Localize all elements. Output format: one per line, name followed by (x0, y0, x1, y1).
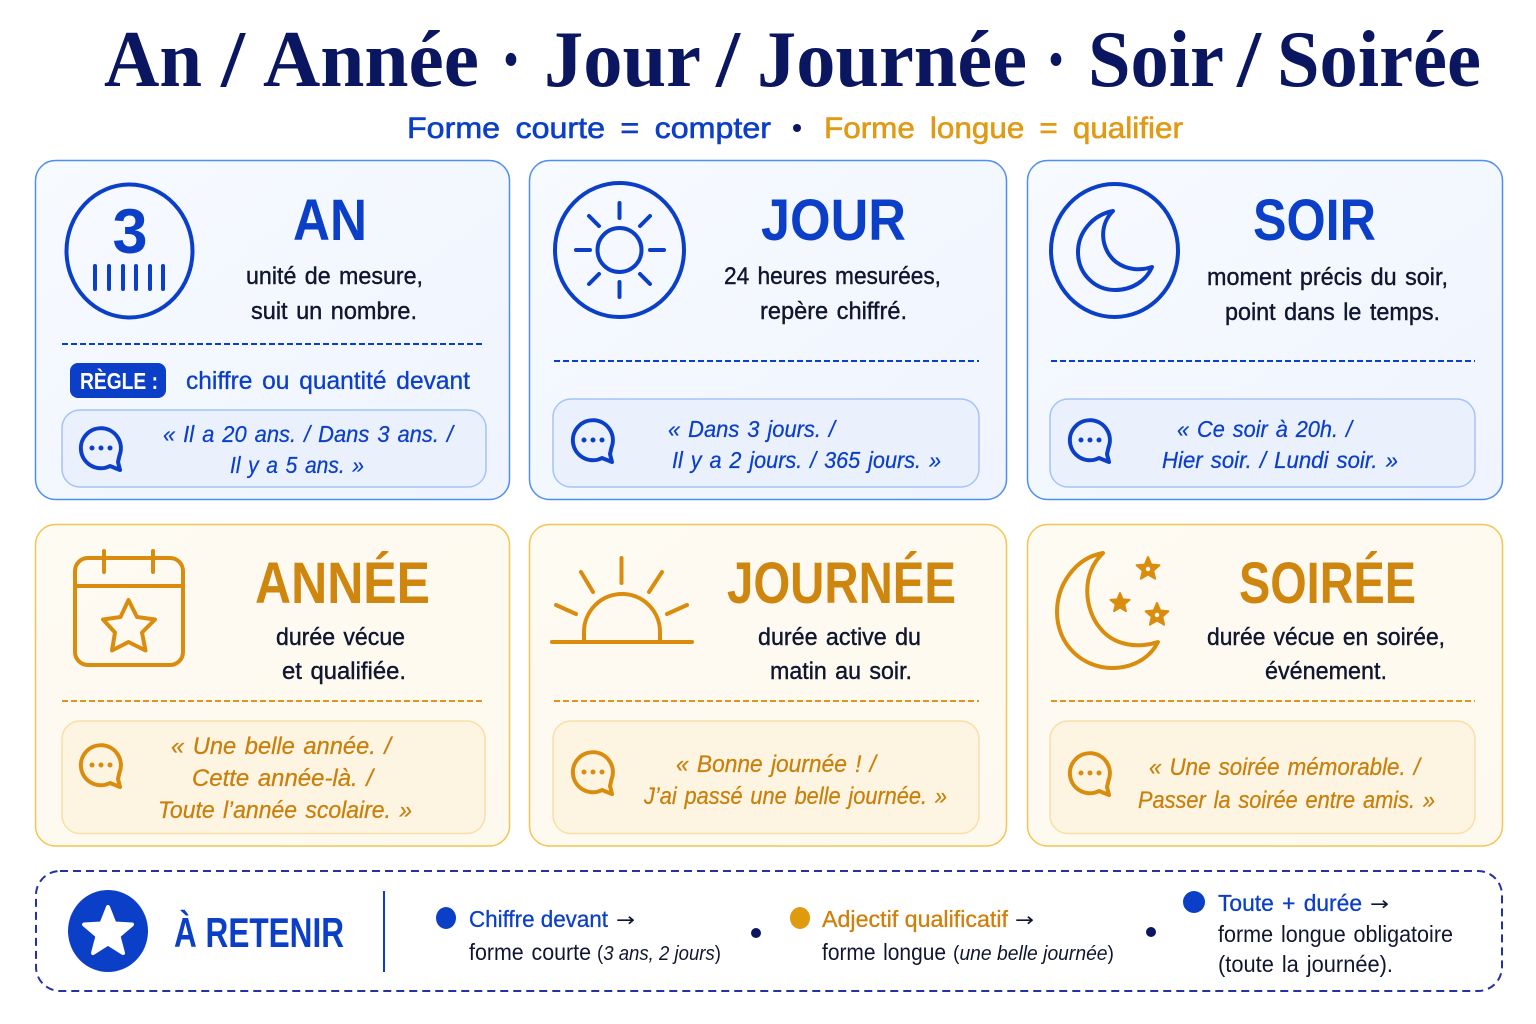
description: JOURNÉE: matin au soir. (770, 658, 912, 685)
example text: JOUR (668, 416, 941, 473)
icon: number three with tally marks: 3 (112, 197, 148, 267)
takeaway: chiffre devant: → (616, 909, 635, 931)
description: AN (246, 263, 423, 325)
example text: SOIR (1162, 416, 1398, 473)
title: Soirée (1277, 16, 1481, 104)
takeaway: chiffre devant: (3 ans, 2 jours) (597, 943, 721, 965)
heading: JOUR: JOUR (761, 188, 906, 253)
takeaway: adjectif qualificatif: → (1015, 909, 1034, 931)
takeaway: toute + durée (1183, 890, 1453, 977)
icon: speech bubble (573, 420, 613, 462)
heading: JOURNÉE: JOURNÉE (727, 551, 956, 616)
rule badge (70, 363, 166, 398)
icon: moon in circle (1051, 184, 1178, 317)
icon: moon and stars (1057, 553, 1168, 668)
example text: AN: Il y a 5 ans. » (230, 452, 364, 478)
description: JOURNÉE: durée active du (758, 624, 921, 651)
takeaway: adjectif qualificatif: (une belle journée) (953, 943, 1114, 965)
title: Journée (757, 16, 1027, 104)
title: Soir (1088, 16, 1224, 104)
icon: speech bubble (1070, 420, 1110, 462)
description: AN: unité de mesure, (246, 263, 423, 290)
example text: ANNÉE: Cette année-là. / (192, 765, 375, 792)
icon: speech bubble (1070, 753, 1110, 795)
example box: SOIRÉE (1050, 721, 1475, 834)
icon: speech bubble (81, 745, 121, 787)
description: ANNÉE: et qualifiée. (282, 658, 406, 685)
example box: JOUR (553, 399, 979, 487)
example box: JOURNÉE (553, 721, 979, 834)
subtitle (407, 112, 1183, 145)
description: JOURNÉE (758, 624, 921, 685)
takeaway: toute + durée: Toute + durée (1218, 890, 1362, 916)
description: JOUR: repère chiffré. (760, 298, 907, 325)
example text: AN: « Il a 20 ans. / Dans 3 ans. / (163, 421, 455, 447)
description: SOIRÉE: événement. (1265, 658, 1387, 685)
panel: à retenir (36, 871, 1502, 991)
example text: SOIR: « Ce soir à 20h. / (1177, 416, 1354, 442)
example text: ANNÉE: « Une belle année. / (171, 733, 393, 760)
rule text: chiffre ou quantité devant (186, 367, 470, 395)
title: Jour (544, 16, 701, 104)
title: / (220, 16, 247, 104)
example text: JOUR: « Dans 3 jours. / (668, 416, 837, 442)
icon: rising sun (552, 558, 692, 642)
takeaway: chiffre devant: Chiffre devant (469, 906, 609, 932)
panel: AN (36, 160, 510, 500)
example text: SOIR: Hier soir. / Lundi soir. » (1162, 447, 1398, 473)
rule badge: RÈGLE : (80, 367, 158, 394)
takeaway: adjectif qualificatif: Adjectif qualificatif (822, 906, 1009, 932)
panel: JOURNÉE (530, 524, 1006, 846)
title: · (1045, 16, 1067, 104)
heading: SOIR: SOIR (1253, 188, 1376, 253)
example text: SOIRÉE (1138, 754, 1435, 814)
separator dot (1146, 927, 1156, 937)
example text: ANNÉE (158, 733, 412, 824)
icon: calendar with star (75, 551, 183, 665)
takeaway: chiffre devant (436, 906, 721, 965)
description: SOIRÉE (1207, 624, 1445, 685)
description: ANNÉE: durée vécue (276, 624, 405, 651)
separator dot (751, 928, 761, 938)
description: JOUR (724, 263, 941, 325)
panel: SOIRÉE (1028, 524, 1502, 846)
subtitle: Forme longue = qualifier (824, 112, 1183, 145)
panel: SOIR (1028, 160, 1502, 500)
example text: AN (163, 421, 455, 478)
takeaway: toute + durée: (toute la journée). (1218, 951, 1393, 977)
example box: AN (62, 410, 486, 487)
description: ANNÉE (276, 624, 406, 685)
example text: JOURNÉE: « Bonne journée ! / (676, 751, 878, 778)
title: Année (263, 16, 479, 104)
example text: JOURNÉE: J’ai passé une belle journée. » (643, 783, 947, 810)
subtitle: Forme courte = compter (407, 112, 771, 145)
example text: SOIRÉE: Passer la soirée entre amis. » (1138, 787, 1435, 814)
description: SOIR: moment précis du soir, (1207, 264, 1448, 291)
title: · (500, 16, 522, 104)
example box: ANNÉE (62, 721, 485, 834)
heading: à retenir: À RETENIR (174, 909, 344, 956)
example text: JOURNÉE (643, 751, 947, 810)
panel: JOUR (530, 160, 1006, 500)
title: An (104, 16, 202, 104)
icon: speech bubble (573, 752, 613, 794)
example box: SOIR (1050, 399, 1475, 487)
takeaway: toute + durée: → (1370, 893, 1389, 915)
example text: ANNÉE: Toute l’année scolaire. » (158, 797, 412, 824)
description: AN: suit un nombre. (251, 298, 417, 325)
heading: SOIRÉE: SOIRÉE (1239, 551, 1416, 616)
description: SOIR (1207, 264, 1448, 326)
example text: JOUR: Il y a 2 jours. / 365 jours. » (672, 447, 941, 473)
panel: ANNÉE (36, 524, 510, 846)
takeaway: chiffre devant: forme courte (469, 939, 591, 965)
heading: ANNÉE: ANNÉE (255, 551, 430, 616)
title: / (715, 16, 742, 104)
icon: speech bubble (81, 428, 121, 470)
title: / (1236, 16, 1263, 104)
heading: AN: AN (293, 188, 367, 253)
icon: sun in circle (555, 183, 684, 317)
example text: SOIRÉE: « Une soirée mémorable. / (1149, 754, 1422, 781)
title (104, 16, 1481, 104)
takeaway: adjectif qualificatif (790, 906, 1114, 965)
description: SOIR: point dans le temps. (1225, 299, 1440, 326)
description: JOUR: 24 heures mesurées, (724, 263, 941, 290)
takeaway: toute + durée: forme longue obligatoire (1218, 921, 1453, 947)
icon: number three with tally marks (66, 184, 192, 318)
icon: star badge (68, 890, 148, 972)
takeaway: adjectif qualificatif: forme longue (822, 939, 946, 965)
description: SOIRÉE: durée vécue en soirée, (1207, 624, 1445, 651)
